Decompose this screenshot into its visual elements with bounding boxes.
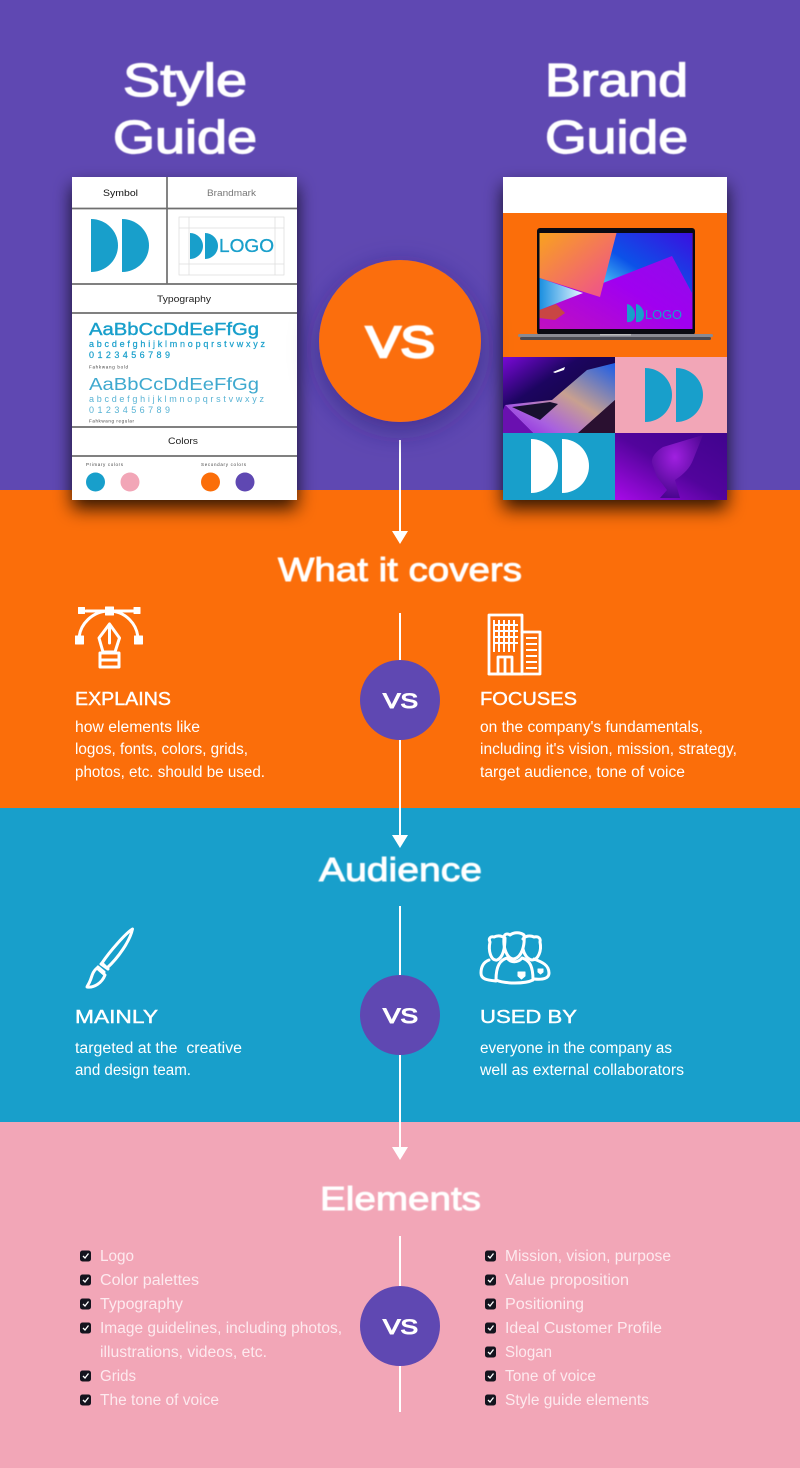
- title: Style Guide: Style: [123, 54, 247, 106]
- panel: purple header background: [0, 0, 800, 490]
- checklist: brand guide elements: Value proposition: [505, 1272, 629, 1289]
- photo: purple object: [615, 433, 727, 500]
- text: used by: everyone in the company as: [480, 1040, 672, 1057]
- badge: main VS: [319, 260, 481, 422]
- typography specimen regular: AaBbCcDdEeFfGg: [89, 374, 259, 394]
- label: Symbol: Symbol: [103, 188, 138, 198]
- brandmark logo with grid: [179, 217, 284, 275]
- panel: audience background: [0, 808, 800, 1122]
- typography specimen regular: Fahkwang regular: [89, 418, 134, 424]
- badge: VS audience: VS: [383, 1005, 418, 1028]
- text: mainly: [75, 1007, 242, 1079]
- panel: what it covers background: [0, 490, 800, 808]
- photo: laptop keyboard: [503, 357, 615, 433]
- checklist: brand guide elements: Style guide elements: [505, 1392, 649, 1409]
- title: Style Guide: Guide: [113, 111, 257, 163]
- label: Colors: Colors: [168, 436, 199, 446]
- panel: brand guide card: [503, 177, 727, 500]
- typography specimen bold: Fahkwang bold: [89, 364, 128, 370]
- text: focuses: on the company's fundamentals,: [480, 719, 703, 736]
- icon: pen tool: [76, 607, 142, 667]
- badge: VS what it covers: [360, 660, 440, 740]
- checklist: style guide elements: Grids: [100, 1368, 136, 1385]
- divider with VS badge: elements: [360, 1236, 440, 1412]
- laptop mockup: LOGO: [645, 307, 682, 322]
- title: Brand Guide: Guide: [545, 111, 688, 163]
- divider with VS badge: elements: VS: [383, 1316, 418, 1339]
- checklist: brand guide elements: Tone of voice: [505, 1368, 596, 1385]
- panel: style guide card: [72, 177, 297, 500]
- checklist: brand guide elements: Mission, vision, purpose: [505, 1248, 671, 1265]
- primary color swatches: [86, 462, 140, 492]
- panel: elements background: [0, 1122, 800, 1468]
- secondary color swatches: Secondary colors: [201, 462, 247, 467]
- text: mainly: and design team.: [75, 1062, 191, 1079]
- checklist: brand guide elements: Positioning: [505, 1296, 584, 1313]
- arrow: header to what it covers: [392, 440, 408, 544]
- secondary color swatches: [201, 462, 254, 492]
- label: Brandmark: Brandmark: [207, 188, 257, 198]
- checklist: style guide elements: Image guidelines, including photos,: [100, 1320, 342, 1337]
- checklist: style guide elements: Typography: [100, 1296, 183, 1313]
- title: Brand Guide: [545, 54, 688, 163]
- text: explains: photos, etc. should be used.: [75, 764, 265, 781]
- text: explains: how elements like: [75, 719, 200, 736]
- text: focuses: FOCUSES: [480, 689, 577, 709]
- text: explains: logos, fonts, colors, grids,: [75, 741, 248, 758]
- text: focuses: including it's vision, mission, strategy,: [480, 741, 737, 758]
- text: used by: USED BY: [480, 1007, 577, 1027]
- badge: VS what it covers: VS: [383, 690, 418, 713]
- icon: paint brush: [87, 929, 132, 987]
- label: Typography: Typography: [157, 294, 212, 304]
- laptop mockup: [518, 228, 713, 340]
- primary color swatches: Primary colors: [86, 462, 124, 467]
- typography specimen bold: [89, 319, 266, 370]
- checklist: style guide elements: illustrations, videos, etc.: [100, 1344, 267, 1361]
- title: Brand Guide: Brand: [545, 54, 688, 106]
- brandmark logo with grid: LOGO: [219, 236, 274, 256]
- typography specimen bold: abcdefghijklmnopqrstvwxyz: [89, 339, 266, 349]
- typography specimen regular: 0123456789: [89, 405, 170, 415]
- text: focuses: target audience, tone of voice: [480, 764, 685, 781]
- arrow: what it covers to audience: [392, 613, 408, 848]
- checklist: style guide elements: Color palettes: [100, 1272, 199, 1289]
- badge: VS audience: [360, 975, 440, 1055]
- typography specimen bold: 0123456789: [89, 350, 170, 360]
- typography specimen bold: AaBbCcDdEeFfGg: [89, 319, 259, 339]
- icon: symbol logo: [91, 219, 149, 272]
- heading: Audience: Audience: [319, 851, 482, 888]
- icon: logo on pink tile: [615, 357, 727, 433]
- text: explains: EXPLAINS: [75, 689, 171, 709]
- checklist: brand guide elements: Ideal Customer Profile: [505, 1320, 662, 1337]
- title: Style Guide: [113, 54, 257, 163]
- text: used by: [479, 1007, 684, 1079]
- heading: Elements: Elements: [320, 1180, 481, 1217]
- checklist: style guide elements: The tone of voice: [100, 1392, 219, 1409]
- icon: team of people: [481, 933, 549, 983]
- icon: logo on blue tile: [503, 433, 615, 500]
- text: focuses: [480, 689, 737, 781]
- text: mainly: MAINLY: [75, 1007, 158, 1027]
- arrow: audience to elements: [392, 906, 408, 1160]
- checklist: brand guide elements: Slogan: [505, 1344, 552, 1361]
- text: mainly: targeted at the creative: [75, 1040, 242, 1057]
- text: used by: well as external collaborators: [479, 1062, 684, 1079]
- checklist: style guide elements: Logo: [100, 1248, 134, 1265]
- heading: What it covers: What it covers: [278, 551, 522, 588]
- checklist: brand guide elements: [485, 1248, 671, 1409]
- icon: office building: [489, 615, 540, 674]
- badge: main VS: VS: [366, 318, 435, 367]
- typography specimen regular: [89, 374, 264, 424]
- typography specimen regular: abcdefghijklmnopqrstvwxyz: [89, 394, 264, 404]
- text: explains: [75, 689, 265, 781]
- checklist: style guide elements: [80, 1248, 342, 1409]
